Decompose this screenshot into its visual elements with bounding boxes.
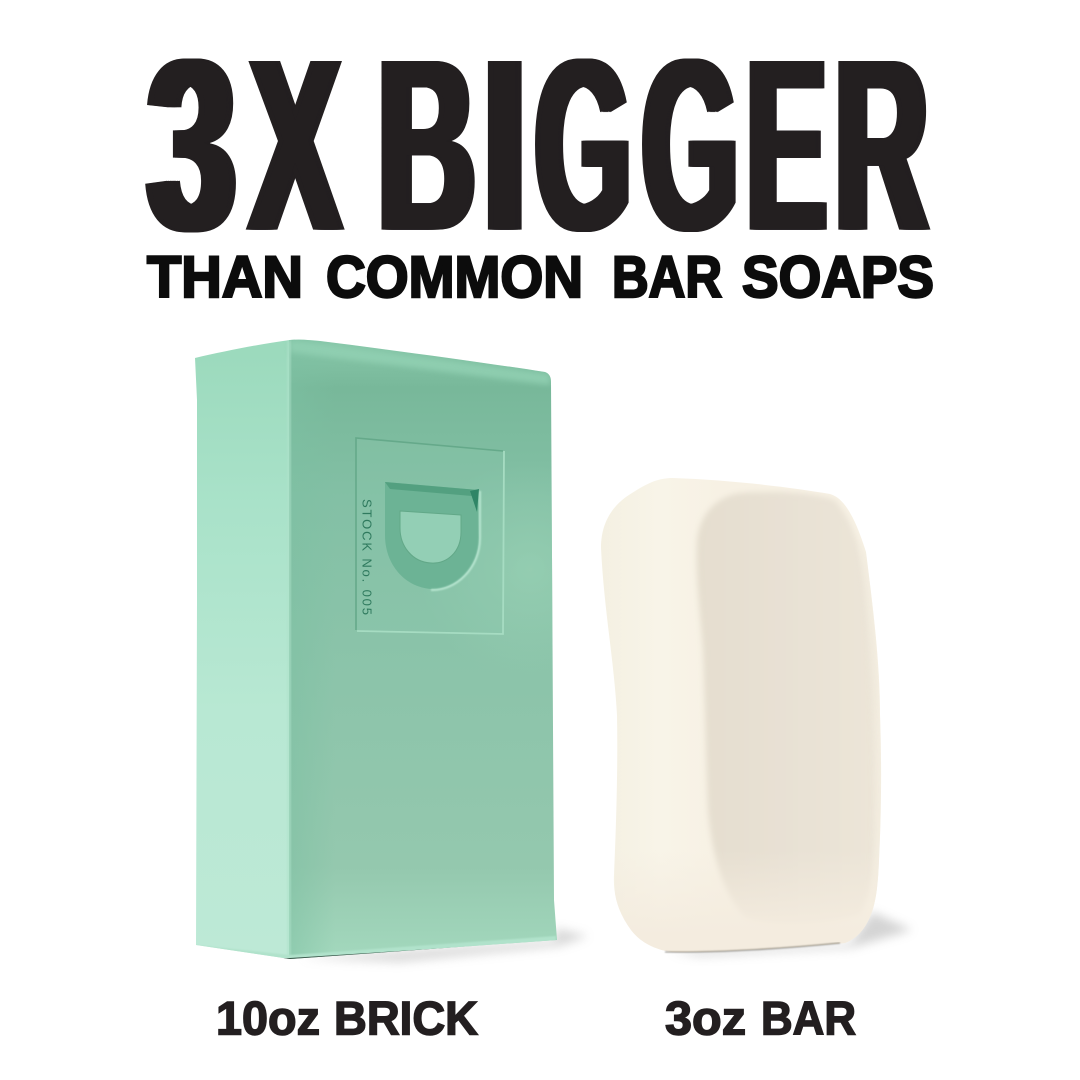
bar front face — [697, 492, 878, 925]
soap brick — [190, 335, 588, 965]
brick stamp panel — [356, 438, 504, 634]
subtitle: BAR — [612, 245, 722, 310]
stock number: STOCK No. 005 — [360, 499, 374, 615]
title: R — [835, 8, 928, 282]
title: E — [746, 8, 827, 282]
brick shadow — [300, 928, 588, 962]
title: B — [378, 8, 475, 282]
subtitle: SOAPS — [742, 245, 934, 310]
label: 3oz bar: 3oz — [665, 992, 746, 1044]
infographic canvas — [145, 58, 933, 1036]
soap bar — [595, 470, 912, 960]
label: 10oz brick — [216, 992, 478, 1044]
title: G — [535, 8, 631, 282]
brick left face — [190, 335, 295, 965]
label: 10oz brick: BRICK — [334, 992, 478, 1044]
title: I — [484, 8, 526, 282]
product comparison artwork and labels — [146, 254, 933, 1036]
D logo — [385, 482, 480, 590]
subtitle: THAN — [147, 245, 303, 310]
subtitle: COMMON — [326, 245, 583, 310]
bar side — [601, 478, 881, 912]
label: 3oz bar: BAR — [761, 992, 856, 1044]
label: 10oz brick: 10oz — [216, 992, 320, 1044]
title: 3 — [148, 8, 235, 282]
subtitle — [147, 245, 934, 310]
title — [145, 8, 930, 282]
bar shadow — [670, 912, 912, 956]
title: X — [250, 8, 340, 282]
title: G — [642, 8, 738, 282]
brick front face — [289, 335, 564, 965]
label: 3oz bar — [665, 992, 856, 1044]
